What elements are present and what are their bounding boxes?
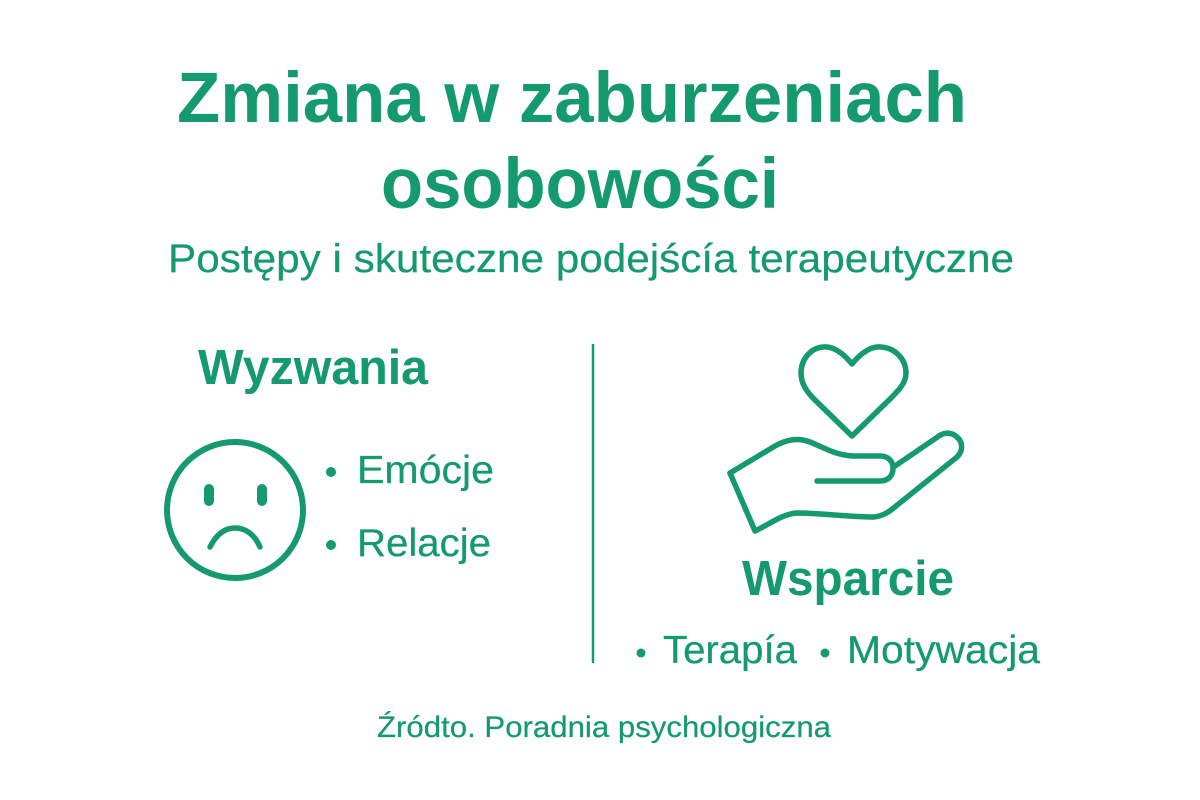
list: challenges xyxy=(326,449,494,565)
source: Źródto. Poradnia psychologiczna xyxy=(377,711,831,744)
subtitle: Postępy i skuteczne podejścía terapeutyczne xyxy=(168,237,1014,281)
heading: Wsparcie: Wsparcie xyxy=(742,552,954,606)
panel: challenges xyxy=(167,341,494,578)
title: osobowości xyxy=(381,145,779,224)
list: challenges: Relacje xyxy=(357,522,491,565)
icon: heart above hand xyxy=(730,347,962,531)
panel: support xyxy=(636,347,1040,672)
heading: Wyzwania: Wyzwania xyxy=(198,341,429,395)
icon: sad face xyxy=(167,442,303,578)
list: challenges: Emócje xyxy=(357,449,494,492)
list: support: Motywacja xyxy=(847,629,1040,672)
list: support xyxy=(636,629,1040,672)
title: Zmiana w zaburzeniach xyxy=(177,59,967,138)
list: support: Terapía xyxy=(663,629,797,672)
title xyxy=(177,59,967,224)
divider xyxy=(592,344,594,663)
